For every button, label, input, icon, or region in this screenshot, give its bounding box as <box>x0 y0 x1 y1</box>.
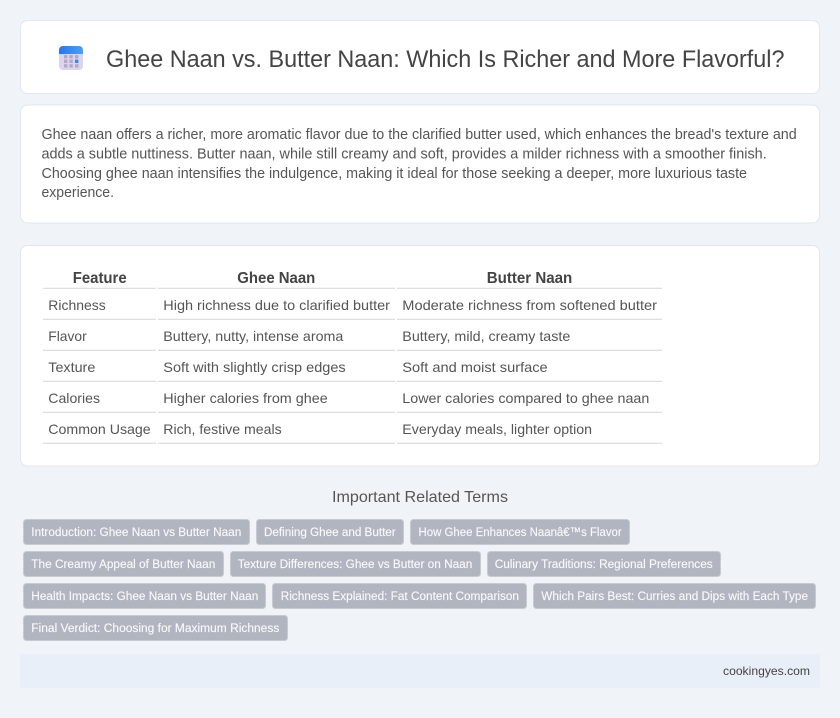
table row: flavor <box>48 328 571 344</box>
table header row: Ghee Naan <box>237 270 315 287</box>
table row: calories: Calories <box>48 390 100 406</box>
table row: texture: Texture <box>48 359 96 375</box>
related terms tags <box>24 520 816 640</box>
table row: texture: Soft and moist surface <box>402 359 548 375</box>
related terms tags: How Ghee Enhances Naanâ€™s Flavor <box>418 525 622 539</box>
title: Ghee Naan vs. Butter Naan: Which Is Richer and More Flavorful? <box>106 46 784 73</box>
table row: richness <box>48 297 657 313</box>
table header row <box>73 270 572 287</box>
table row: calories: Lower calories compared to ghee naan <box>402 390 649 406</box>
icon: calendar <box>59 46 83 70</box>
panel: introduction text: experience. <box>42 185 114 201</box>
footer bar <box>20 654 820 688</box>
panel: introduction text <box>20 105 820 223</box>
panel: introduction text: Ghee naan offers a richer, more aromatic flavor due to the clarified butter used, which enhances the bread's texture and <box>42 127 797 143</box>
panel: comparison table <box>20 246 820 466</box>
related terms tags: Which Pairs Best: Curries and Dips with Each Type <box>541 589 808 603</box>
related terms tags: Texture Differences: Ghee vs Butter on Naan <box>238 557 472 571</box>
table row: flavor: Buttery, mild, creamy taste <box>402 328 571 344</box>
related terms tags: The Creamy Appeal of Butter Naan <box>31 557 215 571</box>
related terms tags: Defining Ghee and Butter <box>264 525 396 539</box>
table row: flavor: Flavor <box>48 328 87 344</box>
table header row: Butter Naan <box>487 270 572 287</box>
table row: richness: Richness <box>48 297 106 313</box>
related terms tags: Culinary Traditions: Regional Preferences <box>495 557 713 571</box>
table row: common usage: Common Usage <box>48 421 151 437</box>
table row: calories <box>48 390 649 406</box>
table row: calories: Higher calories from ghee <box>163 390 328 406</box>
table header row: Feature <box>73 270 127 287</box>
related terms tags: Richness Explained: Fat Content Comparison <box>281 589 519 603</box>
table row: common usage: Everyday meals, lighter option <box>402 421 592 437</box>
related terms tags: Health Impacts: Ghee Naan vs Butter Naan <box>31 589 258 603</box>
table row: flavor: Buttery, nutty, intense aroma <box>163 328 344 344</box>
panel: introduction text: Choosing ghee naan intensifies the indulgence, making it ideal for those seeking a deeper, more luxurious taste <box>42 166 747 182</box>
related terms tags: Final Verdict: Choosing for Maximum Richness <box>31 621 279 635</box>
table row: texture: Soft with slightly crisp edges <box>163 359 346 375</box>
table row: richness: High richness due to clarified butter <box>163 297 390 313</box>
panel: introduction text: adds a subtle nuttiness. Butter naan, while still creamy and soft, provides a milder richness with a smoother finish. <box>42 146 767 162</box>
table row: common usage <box>48 421 592 437</box>
table row: common usage: Rich, festive meals <box>163 421 282 437</box>
table row: richness: Moderate richness from softened butter <box>402 297 657 313</box>
related terms tags: Introduction: Ghee Naan vs Butter Naan <box>31 525 241 539</box>
table row: texture <box>48 359 548 375</box>
panel: title card <box>20 20 820 94</box>
heading: related terms: Important Related Terms <box>332 489 508 506</box>
footer bar: cookingyes.com <box>723 664 810 678</box>
